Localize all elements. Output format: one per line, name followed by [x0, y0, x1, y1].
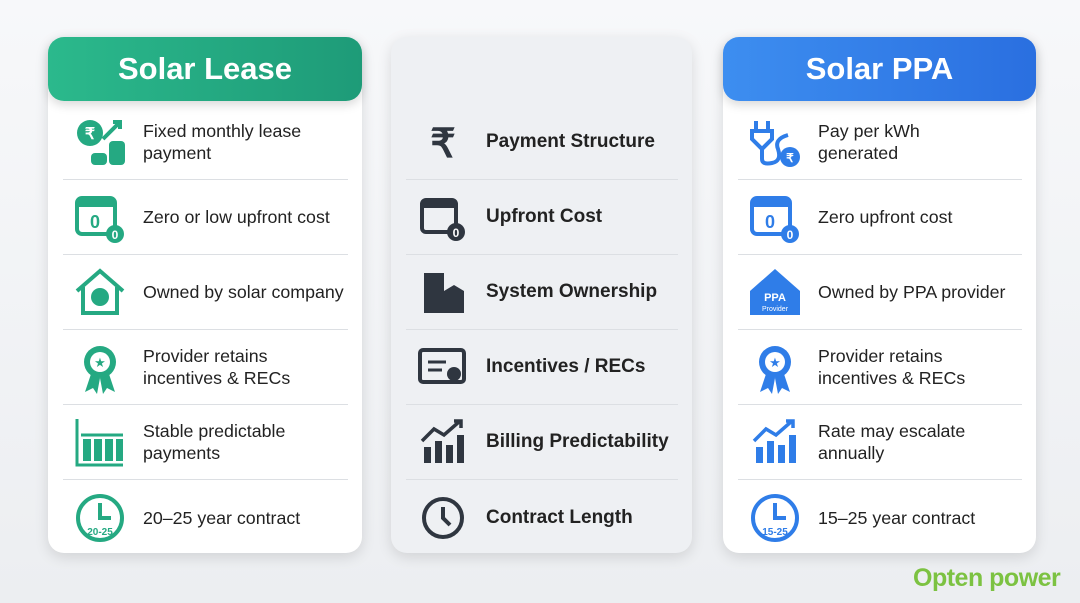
row: pay per kwh: ₹ — [786, 151, 794, 165]
row: contract length — [422, 497, 633, 539]
heading: solar ppa: Solar PPA — [806, 51, 953, 86]
row: upfront: 0 — [112, 228, 119, 242]
panel: solar ppa — [723, 37, 1036, 553]
logo: opten power: Opten power — [913, 564, 1060, 592]
row: incentives: Incentives / RECs — [486, 356, 645, 377]
row: rate escalation: Rate may escalate — [818, 421, 965, 441]
row: system ownership: System Ownership — [486, 281, 657, 302]
row: incentives: ★ — [769, 355, 781, 370]
row: system ownership — [406, 255, 678, 330]
row: pay per kwh: generated — [818, 143, 898, 163]
row: contract — [76, 494, 300, 542]
row: ownership: PPA — [764, 292, 786, 304]
row: contract length: Contract Length — [486, 506, 633, 528]
panel: solar lease — [48, 37, 362, 553]
row: incentives — [406, 330, 678, 405]
row: billing: Stable predictable — [143, 421, 285, 441]
row: incentives: incentives & RECs — [143, 368, 290, 388]
row: incentives: incentives & RECs — [818, 368, 965, 388]
row: upfront: Zero or low upfront cost — [143, 207, 330, 227]
row: contract: 20–25 year contract — [143, 508, 300, 528]
row: rate escalation — [738, 405, 1022, 480]
row: upfront: Zero upfront cost — [818, 207, 952, 227]
row: upfront cost: Upfront Cost — [486, 206, 602, 227]
row: payment structure: ₹ — [430, 122, 456, 166]
row: payment structure: Payment Structure — [486, 131, 655, 152]
row: upfront — [63, 180, 348, 255]
row: incentives — [738, 330, 1022, 405]
row: contract — [751, 494, 976, 542]
row: ownership — [63, 255, 348, 330]
row: contract: 15-25 — [762, 526, 788, 538]
row: pay per kwh: Pay per kWh — [818, 121, 920, 141]
row: payment structure — [406, 105, 678, 180]
row: incentives: Provider retains — [143, 346, 268, 366]
row: contract: 15–25 year contract — [818, 508, 975, 528]
heading: solar lease: Solar Lease — [118, 51, 292, 86]
row: payment — [63, 105, 348, 180]
row: upfront — [738, 180, 1022, 255]
panel: comparison criteria — [391, 37, 692, 553]
heading: solar lease — [48, 37, 362, 101]
heading: solar ppa — [723, 37, 1036, 101]
row: billing predictability — [406, 405, 678, 480]
row: upfront: 0 — [765, 212, 775, 232]
row: upfront: 0 — [90, 212, 100, 232]
row: incentives — [63, 330, 348, 405]
row: payment: payment — [143, 143, 211, 163]
row: incentives: ★ — [94, 355, 106, 370]
row: incentives: Provider retains — [818, 346, 943, 366]
row: ownership — [738, 255, 1022, 330]
row: billing predictability: Billing Predictability — [486, 431, 669, 452]
row: payment: ₹ — [85, 126, 95, 143]
row: pay per kwh — [738, 105, 1022, 180]
row: ownership: Provider — [762, 306, 789, 313]
row: payment: Fixed monthly lease — [143, 121, 301, 141]
row: upfront: 0 — [787, 228, 794, 242]
row: billing — [63, 405, 348, 480]
row: ownership: Owned by PPA provider — [818, 282, 1005, 302]
row: rate escalation: annually — [818, 443, 884, 463]
row: ownership: Owned by solar company — [143, 282, 344, 302]
row: contract: 20-25 — [87, 526, 113, 538]
row: billing: payments — [143, 443, 220, 463]
row: upfront cost: 0 — [453, 226, 460, 240]
row: upfront cost — [406, 180, 678, 255]
